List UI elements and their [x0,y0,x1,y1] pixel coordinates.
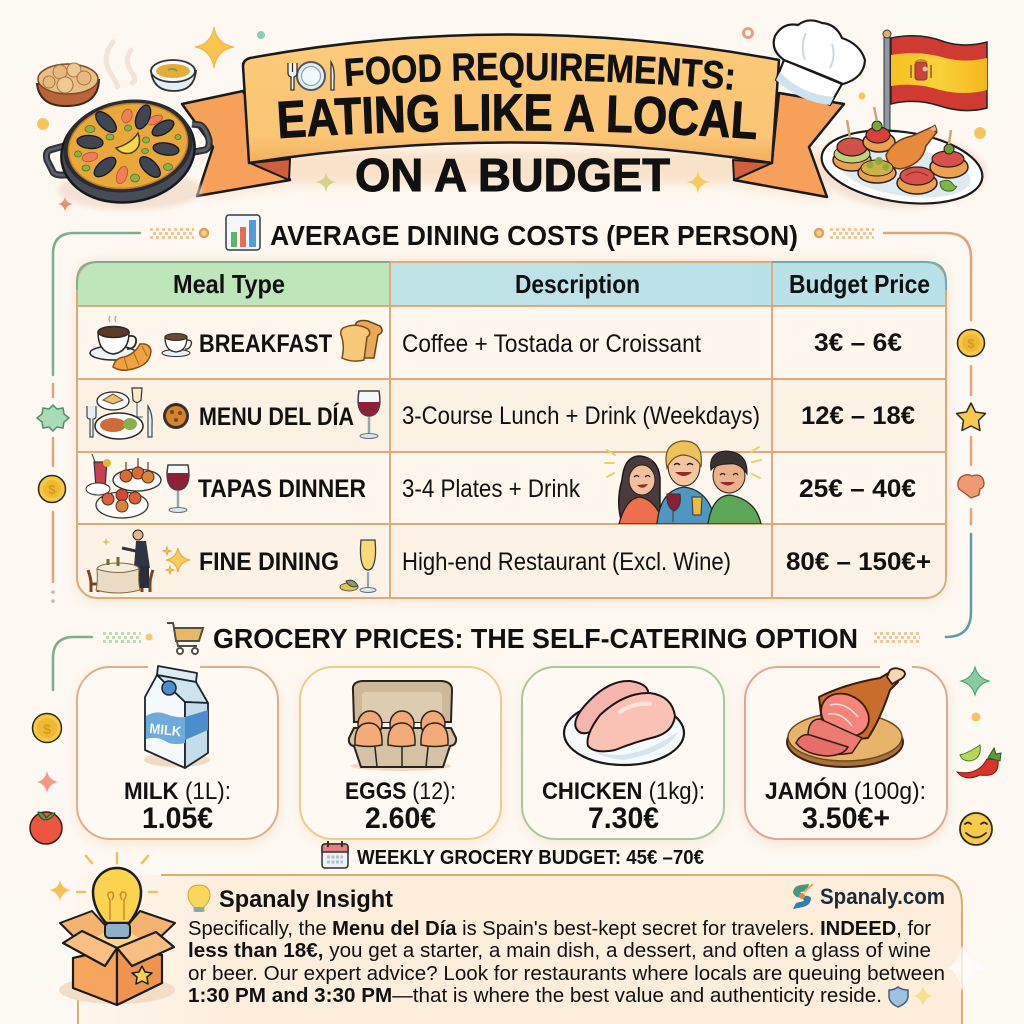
icon: star [956,403,986,430]
tapa 3 [858,157,896,183]
icon: toast [341,321,382,361]
icon: milk carton: MILK [149,720,182,739]
description texts: 3-Course Lunch + Drink (Weekdays) [402,402,760,430]
icon: coin: $ [967,336,975,351]
icon: coin: $ [48,482,56,497]
icon: milk carton [144,666,210,768]
section heading: grocery prices: GROCERY PRICES: THE SELF-CATERING OPTION [213,623,858,654]
price texts: 3€ – 6€ [814,329,902,357]
dark-haired man [708,451,761,524]
price texts [786,329,931,576]
glasses [667,494,702,522]
bread bowl [37,63,99,106]
header labels: Meal Type [173,269,285,299]
row: breakfast: BREAKFAST [199,330,332,358]
icon: chef hat [774,20,865,105]
rows background [77,306,946,379]
icon: small bulb [188,885,210,912]
panel: grocery cards shadows [77,671,947,843]
ribbon right tail [734,93,844,197]
pan body [54,92,202,212]
cheer marks [605,447,761,478]
jamon price: 3.50€+ [802,802,890,835]
rice [62,95,194,197]
icon: green star badge [37,405,69,431]
side icons grocery right [957,667,1001,845]
mussels [76,103,180,181]
eggs price: 2.60€ [365,802,436,835]
header labels: Description [515,269,640,299]
insight body text: or beer. Our expert advice? Look for restaurants where locals are queuing between [188,963,945,985]
icon: tapas plates and drink [86,454,161,518]
connector lines: frame around dining table [53,233,971,690]
ribbon left fold [250,159,290,180]
title [278,52,756,201]
icon: chicken on plate [564,681,684,765]
icon: sparkle [37,771,58,793]
decorative checker [874,634,920,642]
decorative checker left [150,230,194,238]
icon: mini paella [163,403,189,429]
milk label: MILK (1L): [124,778,231,805]
icon: plated meal with cutlery [87,388,152,439]
icon: coffee and croissant [90,316,151,370]
section heading: average dining costs: AVERAGE DINING COSTS (PER PERSON) [270,220,798,251]
icon: green sparkle [961,667,989,695]
icon: sparkles [914,986,932,1006]
milk price: 1.05€ [142,802,213,835]
icon: wine glass [167,465,189,512]
description texts: 3-4 Plates + Drink [402,475,580,503]
description texts: Coffee + Tostada or Croissant [402,330,701,358]
ribbon shadow [200,150,835,200]
description texts: High-end Restaurant (Excl. Wine) [402,548,731,576]
insight body text: Specifically, the Menu del Día is Spain's best-kept secret for travelers. INDEED, for [188,918,931,940]
blond man [657,441,716,524]
icon: small coffee cup [162,334,192,356]
lemon wedge [116,133,139,153]
row: fine dining [88,530,376,593]
side icons grocery left [30,714,62,844]
chicken leg [886,125,937,169]
decorative sparkles and dots [37,27,986,212]
chicken price: 7.30€ [588,802,659,835]
decorative checker right [830,230,874,238]
panel: dining cost table [77,262,946,600]
row: menu del dia: MENU DEL DÍA [199,402,354,431]
card: chicken [522,667,724,839]
icon: shopping cart [167,623,203,654]
side icons left [37,405,69,502]
jamon label: JAMÓN (100g): [765,777,926,805]
table grid [77,262,946,598]
tapa 4 [897,167,937,194]
title line 1: FOOD REQUIREMENTS: [345,52,734,90]
row: tapas dinner: TAPAS DINNER [198,475,366,503]
title line 2: EATING LIKE A LOCAL [278,94,756,140]
eggs label: EGGS (12): [345,778,456,805]
tapa 5 [930,130,968,178]
icon: coin: $ [43,721,51,737]
row: fine dining: FINE DINING [199,548,339,576]
chicken label: CHICKEN (1kg): [542,778,705,805]
icon: Spanish flag [883,30,987,135]
title line 3: ON A BUDGET [355,149,670,201]
description texts [402,330,760,576]
icon: tapas plate [817,107,987,213]
header labels: Budget Price [789,269,930,299]
ribbon right fold [733,160,772,180]
card: jamon [745,660,947,839]
logo: Spanaly [793,884,813,909]
decorative checker [103,634,141,642]
insight body text [188,918,945,1007]
ribbon banner [182,34,844,200]
icon: tomato [30,812,62,844]
row: menu del dia [87,388,380,439]
woman [619,456,664,524]
icon: plate and cutlery [288,62,334,90]
icon: ham slice [958,475,984,498]
price texts: 25€ – 40€ [799,475,916,503]
icon: coin [958,330,984,356]
pan handles [46,146,72,175]
icon: bar chart [226,215,260,250]
weekly grocery budget [322,841,704,869]
side icons right [956,330,986,498]
ribbon main body [243,34,779,163]
insight body text: less than 18€, you get a starter, a main dish, a dessert, and often a glass of wine [188,940,931,962]
insight heading: Spanaly Insight [219,886,393,913]
header labels [173,269,930,299]
icon: smiley [960,813,992,845]
insight body text: 1:30 PM and 3:30 PM —that is where the best value and authenticity reside. [188,985,882,1007]
icon: ham on board [787,668,905,767]
price texts: 12€ – 18€ [801,402,915,430]
steam [106,42,135,87]
icon: egg carton [349,681,456,771]
icon: chili and lime [957,745,1001,778]
watermark sparkle [948,945,990,992]
icon: sparkles [163,547,190,574]
price texts: 80€ – 150€+ [786,548,931,576]
panel: Spanaly insight [49,853,990,1024]
section heading: average dining costs [150,215,874,251]
icon: light bulb in open box [49,853,175,1005]
icon: restaurant table and waiter [88,530,153,593]
icon: calendar [322,841,348,868]
brand name: Spanaly.com [820,884,945,909]
row: tapas dinner [86,454,366,518]
tapa 1 [833,120,871,171]
pan shadow [58,170,202,210]
card: milk [77,660,278,839]
herb [940,180,957,191]
tapa 2 [863,107,895,152]
icon: wine glass [358,391,380,438]
icon: paella pan [37,42,209,212]
illustration: friends toasting [605,441,761,524]
icon: champagne flute and olives [340,540,376,592]
header cells [77,262,390,306]
ribbon left tail [182,91,290,196]
icon: shield [889,987,908,1007]
card: eggs [300,667,501,839]
row: breakfast [90,316,382,370]
soup bowl [151,60,196,91]
weekly grocery budget: WEEKLY GROCERY BUDGET: 45€ –70€ [357,847,704,869]
coat of arms [911,59,931,80]
